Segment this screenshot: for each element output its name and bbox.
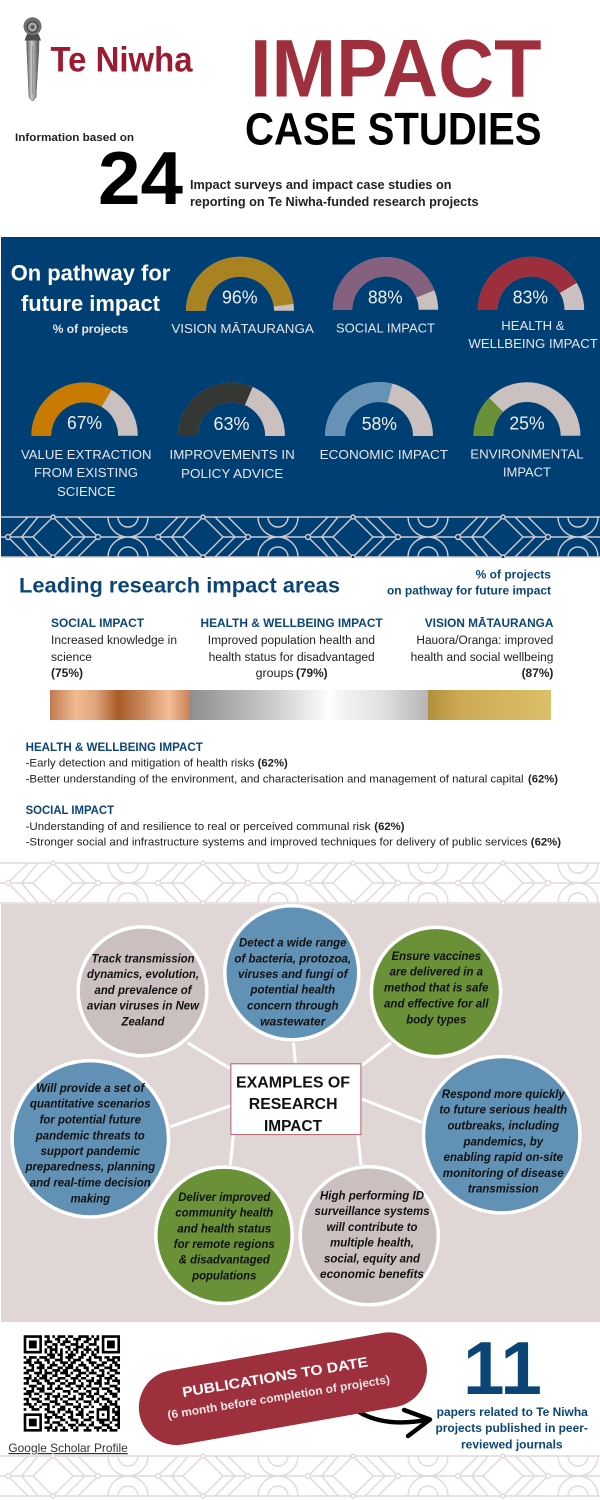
circle: deliver improved health: & disadvantaged — [179, 1255, 271, 1267]
icon: carved taiaha — [24, 17, 42, 100]
panel: examples of research impact — [1, 904, 600, 1322]
column: vision matauranga: VISION MĀTAURANGA — [425, 616, 554, 630]
circle: ensure vaccines: are delivered in a — [390, 967, 484, 979]
list: health and wellbeing impact — [26, 740, 558, 786]
circle: respond more quickly: Respond more quickly — [442, 1089, 565, 1101]
circle: track transmission: avian viruses in New — [87, 1001, 200, 1013]
connector lines — [170, 1043, 422, 1165]
circle: deliver improved health: for remote regions — [174, 1239, 275, 1251]
circle: deliver improved health: and health status — [177, 1223, 271, 1235]
bar: metallic impact bar — [50, 690, 551, 720]
column: health and wellbeing impact: health status for disadvantaged — [209, 652, 375, 664]
gauge: health and wellbeing impact 83% — [468, 257, 598, 351]
note: percent of projects — [387, 569, 551, 598]
circle: detect wastewater: viruses and fungi of — [238, 969, 349, 981]
pill: publications to date — [133, 1326, 433, 1451]
gauge: value extraction 67%: SCIENCE — [57, 484, 116, 499]
circle: deliver improved health: Deliver improved — [178, 1192, 271, 1204]
gauge: improvements in policy advice 63%: POLICY ADVICE — [181, 466, 283, 481]
title: CASE STUDIES: CASE STUDIES — [245, 104, 542, 154]
logo wordmark: Te Niwha — [50, 41, 193, 80]
circle: ensure vaccines — [371, 927, 501, 1057]
column: health and wellbeing impact: HEALTH & WELLBEING IMPACT — [200, 616, 383, 630]
circle: quantitative scenarios: pandemic threats to — [35, 1130, 145, 1142]
list: social impact — [26, 803, 561, 848]
list: health and wellbeing impact: -Early detection and mitigation of health risks — [26, 758, 255, 770]
circle: respond more quickly — [424, 1056, 580, 1213]
list: health and wellbeing impact: HEALTH & WELLBEING IMPACT — [26, 740, 203, 754]
circle: quantitative scenarios: making — [71, 1193, 110, 1205]
text: papers published: projects published in peer- — [436, 1423, 588, 1435]
heading: on pathway: On pathway for — [11, 261, 171, 286]
circle: deliver improved health: community health — [175, 1208, 273, 1220]
central box: RESEARCH — [249, 1096, 338, 1113]
column: social impact: SOCIAL IMPACT — [51, 616, 145, 630]
gauge: vision matauranga 96%: 96% — [222, 288, 258, 308]
column: health and wellbeing impact: Improved population health and — [208, 635, 375, 647]
circle: respond more quickly: enabling rapid on-site — [444, 1152, 564, 1164]
central box: IMPACT — [264, 1118, 322, 1135]
circle: high performing surveillance: High performing ID — [320, 1190, 424, 1202]
circle: high performing surveillance: surveillance systems — [314, 1206, 430, 1218]
gauge: health and wellbeing impact 83%: 83% — [513, 288, 548, 308]
column: vision matauranga: Hauora/Oranga: improved — [416, 635, 553, 647]
gauge: vision matauranga 96% — [171, 257, 314, 336]
heading: on pathway: % of projects — [53, 324, 128, 336]
column: social impact: Increased knowledge in — [51, 635, 177, 647]
text: information based on: Information based on — [15, 132, 134, 144]
circle: track transmission: Track transmission — [92, 953, 194, 965]
list: health and wellbeing impact: (62%) — [528, 774, 558, 786]
gauge: improvements in policy advice 63%: IMPROVEMENTS IN — [170, 447, 295, 462]
gauge: social impact 88%: SOCIAL IMPACT — [336, 320, 435, 336]
link: google scholar profile: Google Scholar Profile — [8, 1441, 128, 1455]
circle: respond more quickly: monitoring of disease — [443, 1168, 564, 1180]
list: social impact: (62%) — [374, 821, 405, 833]
gauge: improvements in policy advice 63%: 63% — [214, 414, 250, 434]
column: health and wellbeing impact: groups — [256, 668, 294, 680]
circle: deliver improved health — [156, 1167, 292, 1304]
gauge: value extraction 67% — [21, 383, 152, 499]
pill: publications to date: PUBLICATIONS TO DATE — [181, 1353, 369, 1400]
note: percent of projects: % of projects — [476, 569, 551, 581]
circle: ensure vaccines: Ensure vaccines — [392, 951, 481, 963]
circle: high performing surveillance — [300, 1167, 438, 1305]
header — [15, 17, 542, 220]
heading: on pathway — [11, 261, 171, 336]
circle: quantitative scenarios: support pandemic — [41, 1146, 141, 1158]
gauge: vision matauranga 96%: VISION MĀTAURANGA — [171, 321, 314, 336]
pill: publications to date: (6 month before completion of projects) — [167, 1374, 391, 1422]
column: social impact — [51, 616, 177, 680]
QR code — [24, 1335, 120, 1432]
circle: respond more quickly: to future serious health — [439, 1105, 567, 1117]
text: surveys description — [190, 178, 479, 209]
circle: detect wastewater: potential health — [250, 985, 335, 997]
circle: quantitative scenarios: and real-time decision — [30, 1177, 151, 1189]
column: health and wellbeing impact — [200, 616, 383, 680]
list: social impact: -Stronger social and infrastructure systems and improved techniques for delivery of public services — [26, 836, 528, 848]
big number 24: 24 — [98, 136, 183, 220]
circle: detect wastewater: of bacteria, protozoa, — [234, 953, 351, 965]
column: vision matauranga — [411, 616, 554, 680]
note: percent of projects: on pathway for future impact — [387, 586, 551, 598]
heading: leading research impact areas: Leading research impact areas — [19, 573, 340, 597]
circle: respond more quickly: pandemics, by — [463, 1136, 544, 1148]
circle: track transmission: and prevalence of — [94, 985, 193, 997]
central box — [231, 1064, 361, 1135]
list: social impact: (62%) — [531, 836, 561, 848]
gauge: environmental impact 25%: 25% — [509, 414, 545, 434]
circle: quantitative scenarios: for potential future — [40, 1114, 142, 1126]
list: health and wellbeing impact: -Better understanding of the environment, and characterisation and management of natural capital — [26, 774, 524, 786]
text: papers published — [436, 1407, 588, 1452]
text: papers published: papers related to Te Niwha — [437, 1407, 588, 1419]
gauge: economic impact 58% — [320, 382, 448, 462]
gauge: value extraction 67%: 67% — [67, 413, 102, 433]
circle: detect wastewater: Detect a wide range — [239, 938, 347, 950]
circle: quantitative scenarios — [12, 1061, 168, 1217]
circle: quantitative scenarios: preparedness, planning — [24, 1162, 155, 1174]
panel: leading research impact areas — [19, 569, 561, 848]
gauge: social impact 88%: 88% — [368, 288, 403, 308]
central box: EXAMPLES OF — [236, 1074, 350, 1092]
circle: detect wastewater: concern through — [247, 1000, 339, 1012]
circle: track transmission: Zealand — [121, 1016, 165, 1028]
gauge: social impact 88% — [333, 257, 438, 336]
arrow — [358, 1410, 430, 1436]
gauge: environmental impact 25% — [470, 382, 584, 480]
gauge: economic impact 58%: ECONOMIC IMPACT — [320, 447, 448, 462]
circle: high performing surveillance: multiple health, — [330, 1238, 414, 1250]
gauge: economic impact 58%: 58% — [362, 414, 397, 434]
circle: track transmission: dynamics, evolution, — [87, 969, 199, 981]
text: surveys description: Impact surveys and impact case studies on — [190, 178, 452, 192]
list: social impact: -Understanding of and resilience to real or perceived communal risk — [26, 821, 371, 833]
column: vision matauranga: (87%) — [522, 668, 554, 680]
column: social impact: science — [51, 652, 92, 664]
gauge: environmental impact 25%: ENVIRONMENTAL — [470, 446, 584, 462]
list: social impact: SOCIAL IMPACT — [26, 803, 115, 817]
gauge: value extraction 67%: FROM EXISTING — [34, 465, 138, 480]
circle: ensure vaccines: method that is safe — [384, 983, 489, 995]
circle: respond more quickly: transmission — [468, 1184, 539, 1196]
column: social impact: (75%) — [51, 668, 83, 680]
circle: detect wastewater — [225, 906, 359, 1040]
gauge: value extraction 67%: VALUE EXTRACTION — [21, 447, 152, 462]
text: surveys description: reporting on Te Niwha-funded research projects — [190, 195, 479, 209]
circle: respond more quickly: outbreaks, including — [447, 1121, 559, 1133]
circle: high performing surveillance: will contribute to — [326, 1222, 418, 1234]
circle: detect wastewater: wastewater — [260, 1016, 326, 1028]
gauge: environmental impact 25%: IMPACT — [503, 464, 551, 480]
circle: ensure vaccines: and effective for all — [384, 998, 489, 1010]
circle: quantitative scenarios: Will provide a set of — [36, 1083, 145, 1095]
circle: high performing surveillance: economic benefits — [320, 1269, 424, 1281]
text: papers published: reviewed journals — [461, 1440, 563, 1452]
column: vision matauranga: health and social wellbeing — [411, 652, 553, 664]
circle: high performing surveillance: social, equity and — [324, 1253, 421, 1265]
gauge: health and wellbeing impact 83%: WELLBEING IMPACT — [468, 336, 598, 351]
footer — [8, 1326, 588, 1455]
title: IMPACT: IMPACT — [250, 24, 542, 114]
circle: track transmission — [78, 927, 207, 1056]
logo: Te Niwha — [24, 17, 193, 100]
panel: on pathway for future impact — [1, 237, 600, 558]
circle: ensure vaccines: body types — [406, 1014, 466, 1026]
circle: quantitative scenarios: quantitative scenarios — [30, 1099, 151, 1111]
column: health and wellbeing impact: (79%) — [296, 668, 328, 680]
list: health and wellbeing impact: (62%) — [258, 758, 288, 770]
heading: on pathway: future impact — [21, 291, 161, 316]
big number 11: 11 — [463, 1326, 542, 1410]
circle: deliver improved health: populations — [191, 1271, 256, 1283]
gauge: health and wellbeing impact 83%: HEALTH & — [501, 318, 565, 333]
gauge: improvements in policy advice 63% — [170, 383, 295, 481]
